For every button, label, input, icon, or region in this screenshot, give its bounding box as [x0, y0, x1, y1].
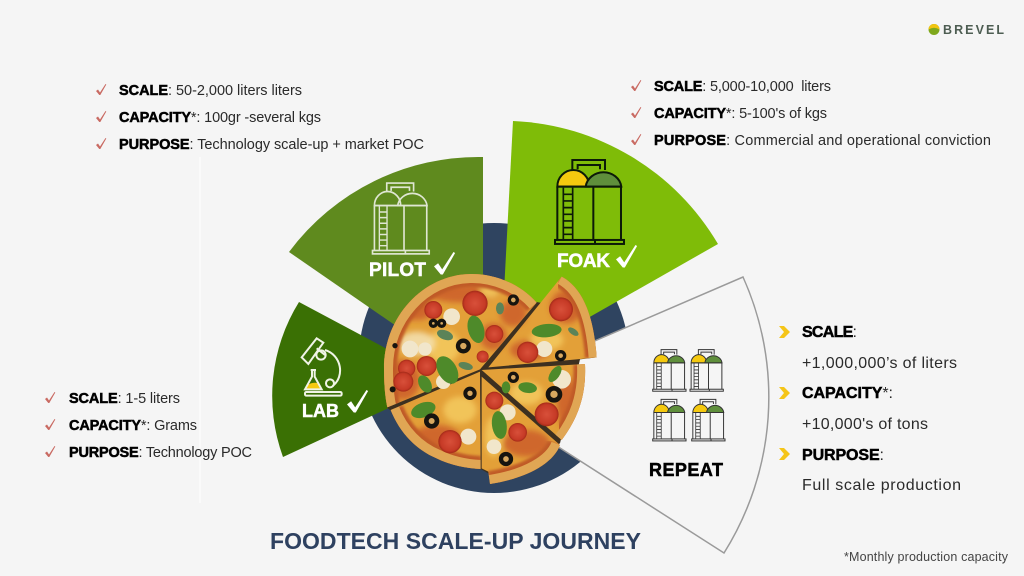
icon: pilot silo — [372, 183, 429, 254]
pizza — [380, 270, 600, 490]
text block: lab specs: CAPACITY*: Grams — [69, 418, 197, 434]
text block: repeat specs: SCALE: — [802, 324, 857, 341]
text block: repeat specs: CAPACITY*: — [802, 385, 893, 402]
label: lab: LAB — [302, 401, 339, 421]
text block: pilot specs: PURPOSE: Technology scale-up + market POC — [119, 137, 424, 153]
label: foak: FOAK — [557, 251, 610, 272]
text block: repeat specs: Full scale production — [802, 477, 961, 494]
label: pilot: PILOT — [369, 260, 426, 281]
navy ring behind pizza — [359, 223, 629, 493]
panel: pilot sector — [289, 157, 483, 386]
footnote: *Monthly production capacity — [844, 550, 1009, 564]
panel: repeat sector — [474, 277, 769, 553]
text block: foak specs: SCALE: 5,000-10,000 liters — [654, 79, 831, 95]
text block: foak specs: PURPOSE: Commercial and operational conviction — [654, 133, 991, 149]
text block: repeat specs: PURPOSE: — [802, 447, 884, 464]
text block: lab specs: PURPOSE: Technology POC — [69, 445, 252, 461]
icon: lab check — [347, 390, 368, 413]
text block: pilot specs — [96, 83, 424, 153]
icon: chevrons — [779, 326, 790, 460]
icon: foak check — [616, 245, 637, 268]
icon: check list lab — [45, 392, 55, 457]
title: FOODTECH SCALE-UP JOURNEY — [270, 528, 641, 554]
text block: pilot specs: CAPACITY*: 100gr -several kgs — [119, 110, 321, 126]
panel: foak sector — [500, 121, 718, 368]
text block: lab specs: SCALE: 1-5 liters — [69, 391, 180, 407]
icon: check list foak — [631, 80, 641, 145]
icon: check list pilot — [96, 84, 106, 149]
text block: repeat specs: +1,000,000’s of liters — [802, 355, 957, 372]
icon: pilot check — [434, 252, 455, 275]
text block: lab specs — [45, 391, 252, 461]
text block: foak specs: CAPACITY*: 5-100's of kgs — [654, 106, 827, 122]
text block: repeat specs — [779, 324, 961, 494]
icon: foak silo — [555, 160, 624, 244]
icon: microscope — [302, 338, 342, 396]
logo: Brevel: BREVEL — [943, 23, 1004, 37]
text block: repeat specs: +10,000's of tons — [802, 416, 928, 433]
text block: pilot specs: SCALE: 50-2,000 liters liters — [119, 83, 302, 99]
icon: repeat silos — [653, 350, 725, 441]
label: repeat: REPEAT — [649, 460, 723, 480]
text block: foak specs — [631, 79, 991, 149]
panel: lab sector — [272, 302, 447, 457]
